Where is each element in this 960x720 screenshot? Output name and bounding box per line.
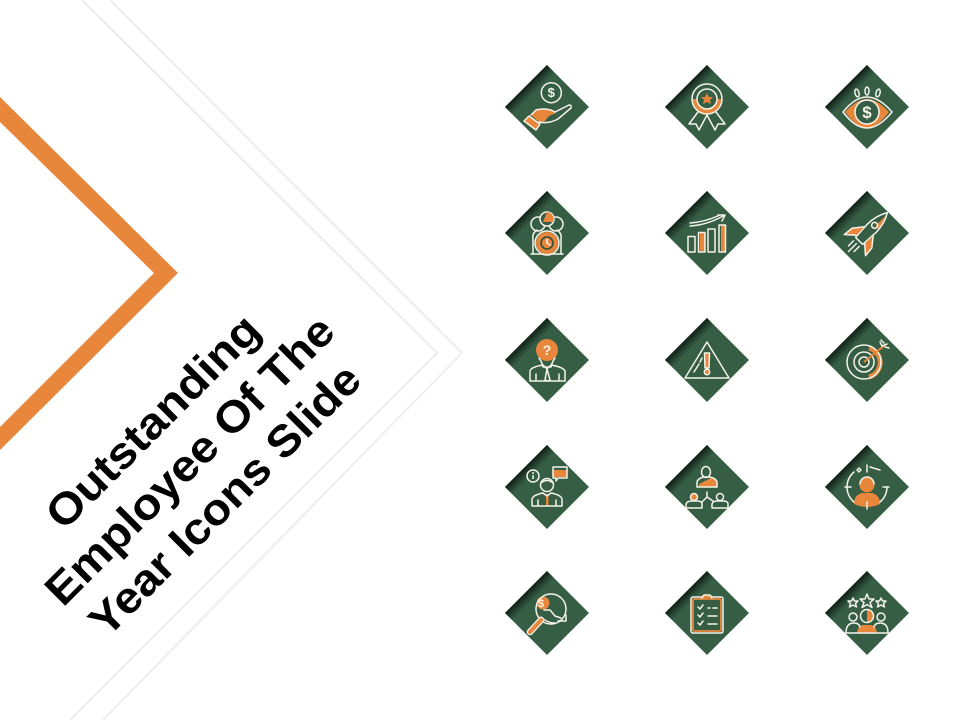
icon tile: team hierarchy [665, 445, 749, 529]
icon tile: team with stars [825, 571, 909, 655]
icon tile: businessman with question bulb [505, 318, 589, 402]
icon tile: eye with dollar: $ [862, 103, 872, 122]
icon tile: hand holding coin: $ [548, 85, 556, 100]
title: Year Icons Slide [79, 355, 371, 646]
icon tile: award ribbon [665, 65, 749, 149]
icon tile: hand holding coin [505, 65, 589, 149]
icon tile: businessman with question bulb: ? [543, 342, 551, 358]
icon tile: target with arrow [825, 318, 909, 402]
icon tile: eye with dollar [825, 65, 909, 149]
icon tile: manager with info bubbles [505, 445, 589, 529]
icon tile: warning triangle [665, 318, 749, 402]
icon tile: team with clock [505, 191, 589, 275]
icon tile: magnifier with dollar [505, 571, 589, 655]
orange chevron [0, 97, 178, 450]
icon tile: magnifier with dollar: $ [538, 598, 544, 610]
icon tile: checklist clipboard [665, 571, 749, 655]
title: Outstanding [36, 305, 270, 539]
icon tile: person in crosshair [825, 445, 909, 529]
title: Employee Of The [35, 306, 344, 615]
icon tile: growth bar chart [665, 191, 749, 275]
icon tile: rocket [825, 191, 909, 275]
